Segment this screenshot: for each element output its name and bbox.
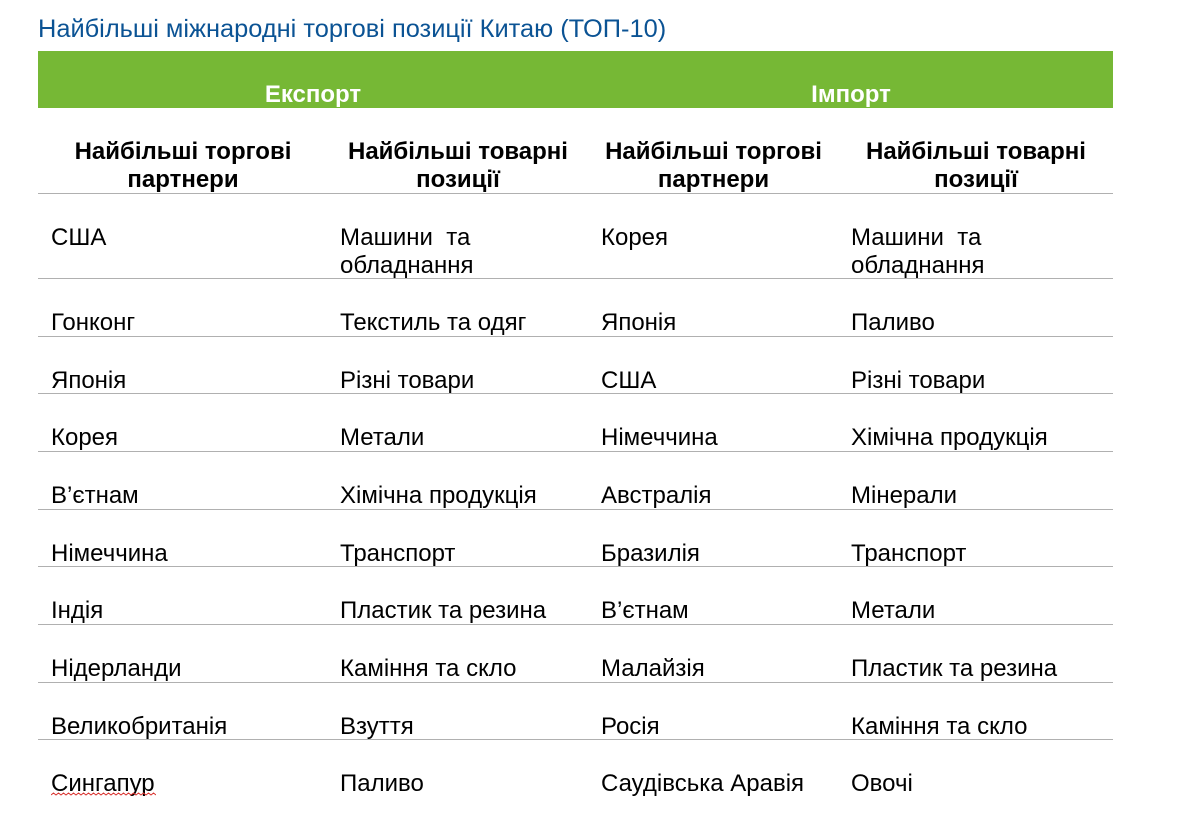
row 1: Корея (601, 224, 668, 251)
spell-check underline (51, 792, 156, 796)
row 8: Пластик та резина (851, 655, 1057, 682)
row 4: Німеччина (601, 424, 718, 451)
row 3: США (601, 367, 656, 394)
column headers (38, 137, 1113, 194)
row 8: Каміння та скло (340, 655, 516, 682)
row 2: Текстиль та одяг (340, 309, 526, 336)
heading: import: Імпорт (811, 81, 891, 108)
heading: export: Експорт (265, 81, 361, 108)
title: Найбільші міжнародні торгові позиції Китаю (ТОП-10) (38, 15, 666, 43)
column header: import partners: Найбільші торгові (605, 138, 822, 165)
row 3: Різні товари (340, 367, 474, 394)
row 3: Японія (51, 367, 126, 394)
row 1 (38, 194, 1113, 279)
row 5: В’єтнам (51, 482, 139, 509)
row 4: Метали (340, 424, 424, 451)
row 10: Паливо (340, 770, 424, 797)
row 7: Пластик та резина (340, 597, 546, 624)
row 7: Індія (51, 597, 103, 624)
row 3 (38, 337, 1113, 394)
row 8: Малайзія (601, 655, 705, 682)
row 9: Каміння та скло (851, 713, 1027, 740)
row 6 (38, 510, 1113, 567)
row 10: Саудівська Аравія (601, 770, 804, 797)
row 8: Нідерланди (51, 655, 182, 682)
column header: import partners: партнери (658, 166, 769, 193)
column header: export partners: Найбільші торгові (75, 138, 291, 165)
row 7: Метали (851, 597, 935, 624)
row 5 (38, 452, 1113, 510)
column header: import goods: позиції (934, 166, 1018, 193)
row 6: Німеччина (51, 540, 168, 567)
row 7 (38, 567, 1113, 625)
row 4: Корея (51, 424, 118, 451)
row 10: Сингапур (51, 770, 155, 797)
row 1: Машини та (340, 224, 470, 251)
row 3: Різні товари (851, 367, 985, 394)
row 6: Транспорт (851, 540, 966, 567)
row 8 (38, 625, 1113, 683)
row 9: Взуття (340, 713, 414, 740)
row 2: Японія (601, 309, 676, 336)
row 6: Транспорт (340, 540, 455, 567)
row 9 (38, 683, 1113, 740)
column header: import goods (866, 138, 1086, 193)
row 2: Паливо (851, 309, 935, 336)
column header: export partners: партнери (127, 166, 239, 193)
row 2: Гонконг (51, 309, 135, 336)
row 9: Росія (601, 713, 660, 740)
row 4 (38, 394, 1113, 452)
column header: export goods: позиції (416, 166, 500, 193)
row 1: США (51, 224, 106, 251)
row 4: Хімічна продукція (851, 424, 1048, 451)
row 1: обладнання (851, 252, 984, 279)
row 10 (51, 770, 913, 797)
row 6: Бразилія (601, 540, 700, 567)
row 5: Австралія (601, 482, 712, 509)
row 10: Овочі (851, 770, 913, 797)
column header: export goods: Найбільші товарні (348, 138, 568, 165)
column header: export goods (348, 138, 568, 193)
column header: import goods: Найбільші товарні (866, 138, 1086, 165)
green header band (38, 51, 1113, 108)
column header: export partners (75, 138, 291, 193)
row 1: обладнання (340, 252, 473, 279)
row 5: Хімічна продукція (340, 482, 537, 509)
row 9: Великобританія (51, 713, 227, 740)
column header: import partners (605, 138, 822, 193)
row 5: Мінерали (851, 482, 957, 509)
row 1: Машини та (851, 224, 981, 251)
row 2 (38, 279, 1113, 337)
row 7: В’єтнам (601, 597, 689, 624)
